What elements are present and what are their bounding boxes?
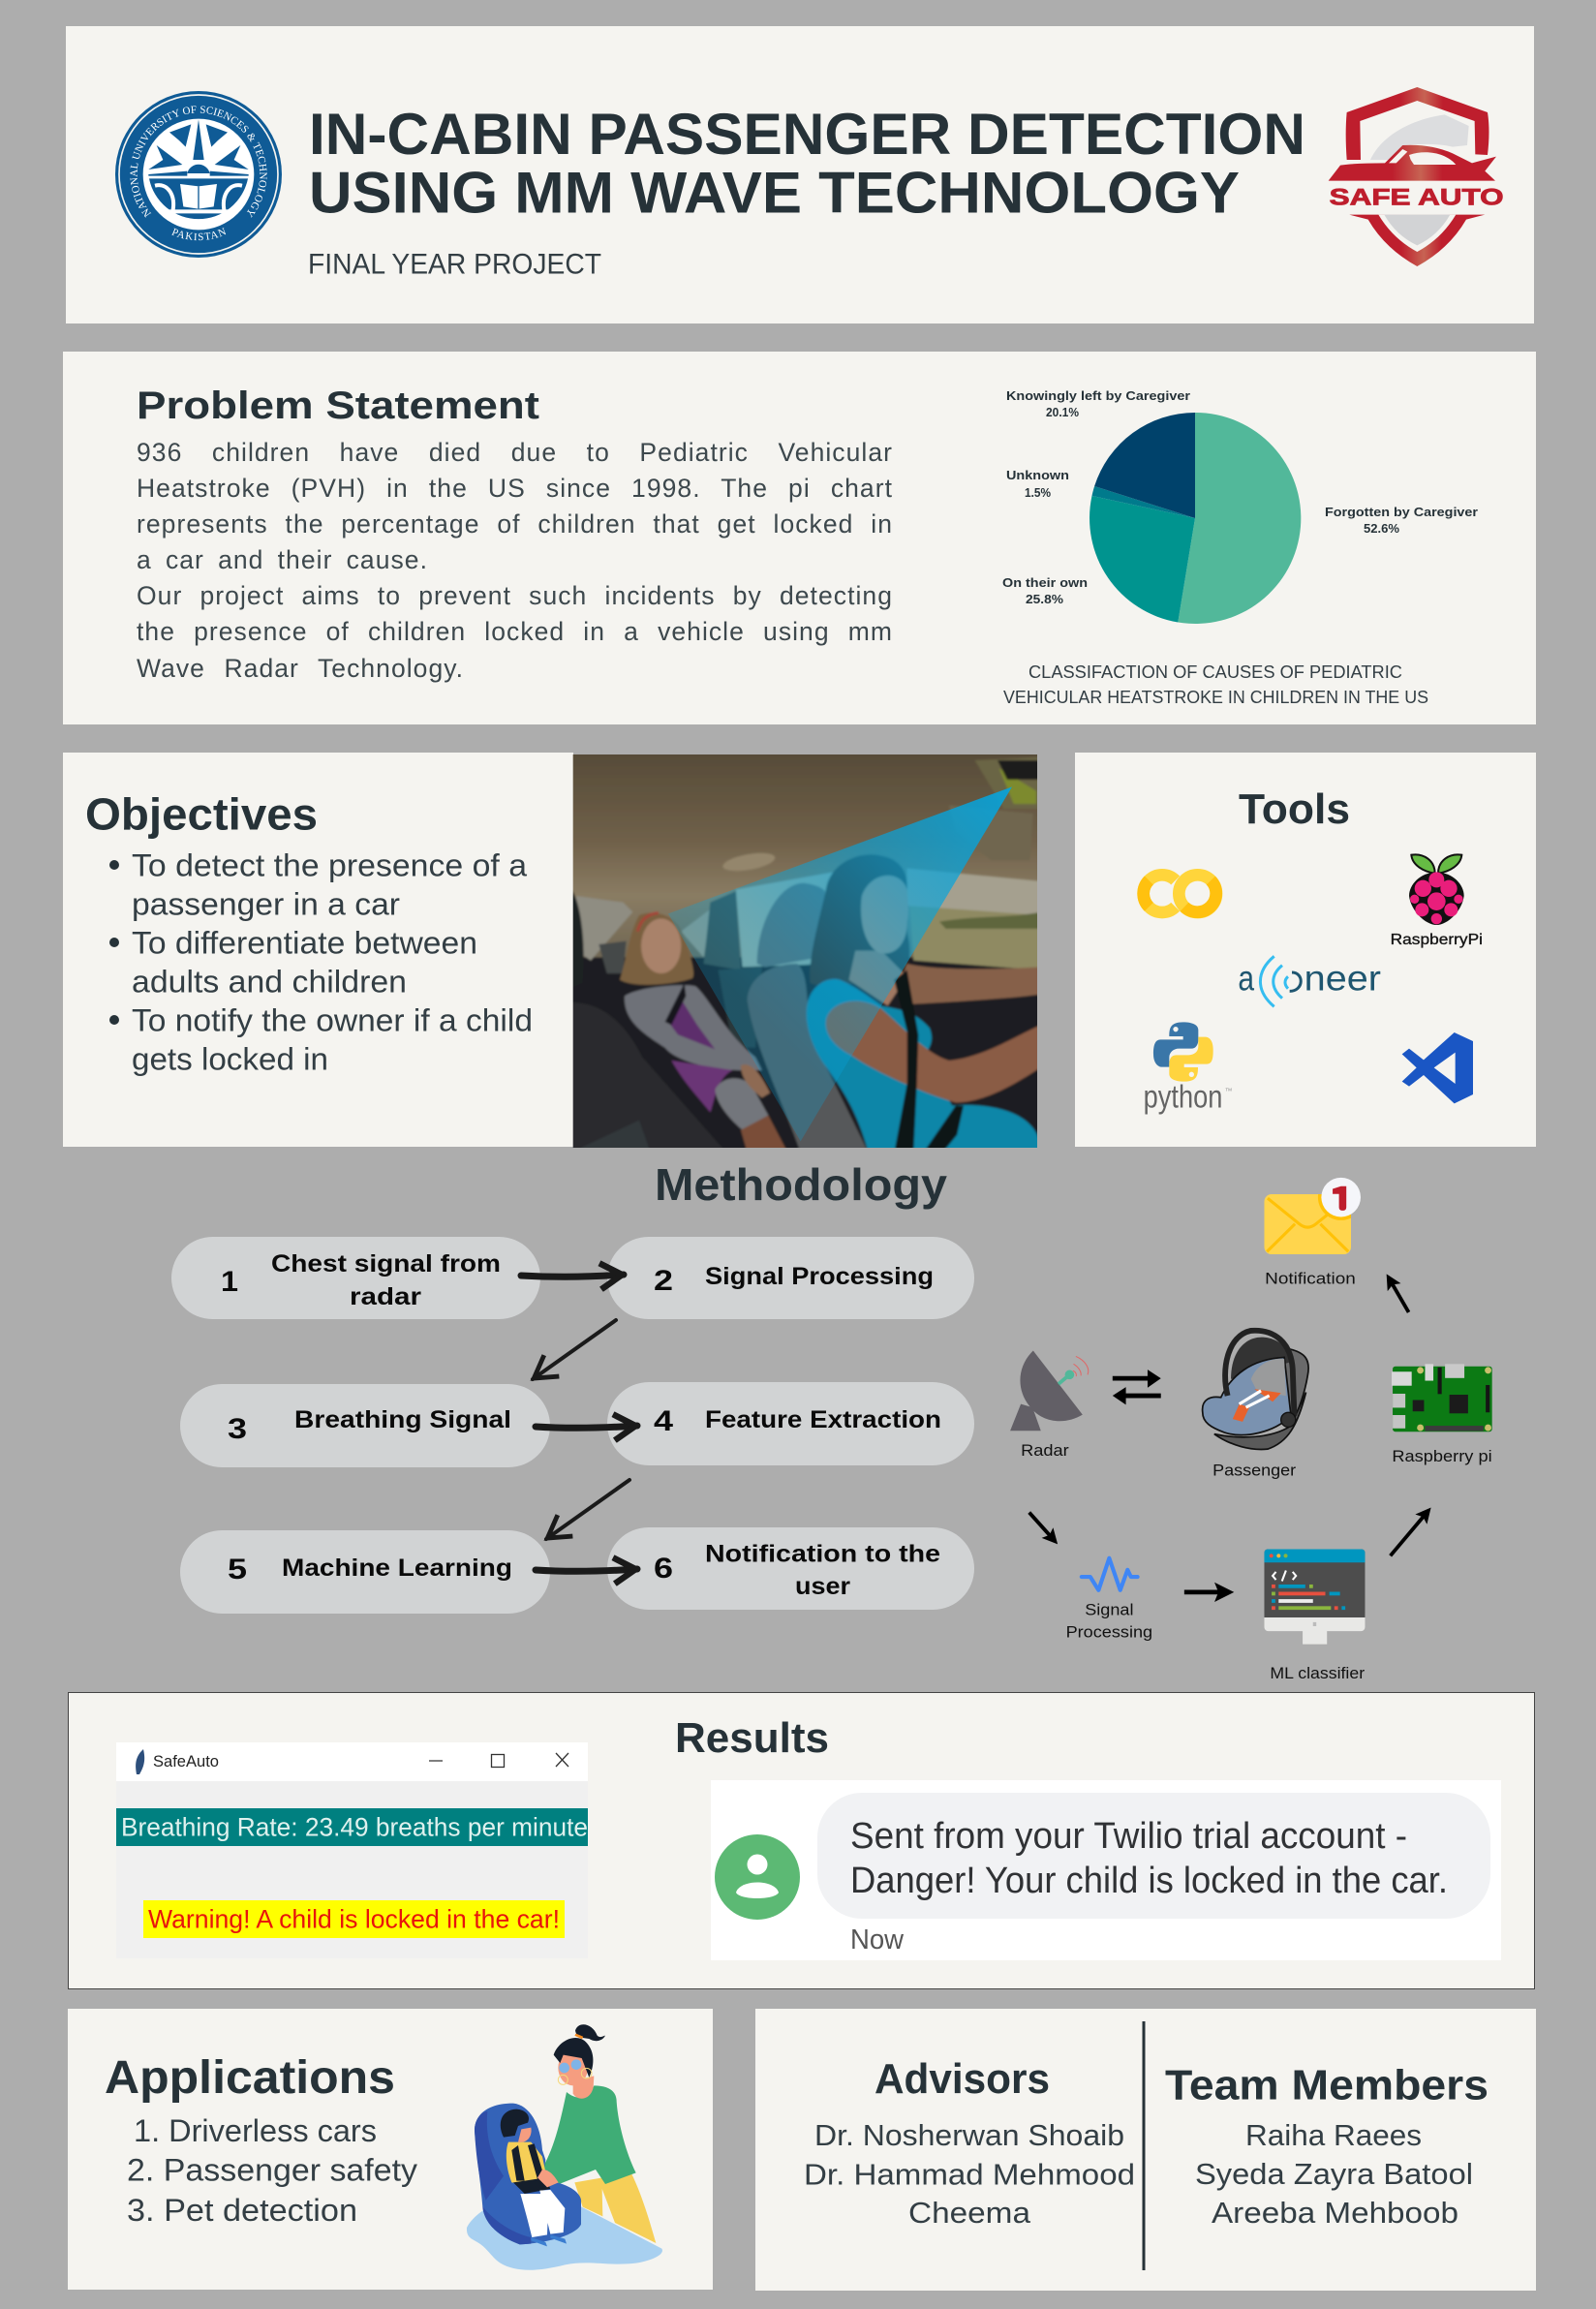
- heading: problem statement: Problem Statement: [137, 385, 539, 427]
- icon: raspberry pi: [1391, 854, 1483, 948]
- step 4 pill: 4: [654, 1405, 673, 1437]
- pie label: forgotten: Forgotten by Caregiver: [1325, 505, 1478, 519]
- screenshot: SMS notification: [711, 1780, 1501, 1960]
- problem statement body text: represents the percentage of children that get locked in: [137, 509, 893, 539]
- pie label: on their own: On their own: [1002, 575, 1088, 590]
- team members: Team Members: [1165, 2061, 1489, 2109]
- arrows between steps: [521, 1275, 637, 1571]
- objectives list: To differentiate between: [132, 926, 477, 961]
- step 1 pill: 1: [221, 1266, 238, 1298]
- screenshot: SafeAuto desktop window: SafeAuto: [153, 1752, 219, 1770]
- pie label: knowingly left: [1006, 388, 1190, 419]
- icon: python: [1144, 1022, 1232, 1115]
- pie label: on their own: [1002, 575, 1088, 606]
- system flow diagram: [1010, 1174, 1492, 1682]
- illustration: parent buckling child in car seat: [467, 2024, 662, 2270]
- icon: Safe Auto shield logo: [1329, 87, 1504, 266]
- pie chart: [1002, 388, 1478, 624]
- icon: NUST university seal: [115, 91, 282, 258]
- heading: tools: Tools: [1239, 785, 1350, 833]
- step 5 pill: Machine Learning: [282, 1555, 512, 1582]
- advisors: [804, 2055, 1135, 2230]
- screenshot: SMS notification: Danger! Your child is locked in the car.: [850, 1861, 1448, 1901]
- step 1 pill: [171, 1237, 540, 1319]
- objectives list: [109, 848, 533, 1077]
- panel: applications: [68, 2009, 713, 2290]
- pie label: unknown: [1006, 468, 1069, 500]
- pie label: knowingly left: Knowingly left by Caregiver: [1006, 388, 1190, 403]
- advisors: Advisors: [875, 2055, 1050, 2103]
- icon: signal waveform: Processing: [1066, 1624, 1152, 1642]
- objectives list: passenger in a car: [132, 887, 400, 922]
- heading: objectives: Objectives: [85, 788, 318, 839]
- problem statement body text: [137, 438, 893, 683]
- advisors: Dr. Nosherwan Shoaib: [814, 2118, 1124, 2152]
- icon: notification: [1264, 1174, 1364, 1288]
- pie label: forgotten: [1325, 505, 1478, 536]
- subtitle: FINAL YEAR PROJECT: [308, 248, 601, 281]
- problem statement body text: Wave Radar Technology.: [137, 654, 464, 683]
- arrows: radar to passenger: [1113, 1370, 1161, 1404]
- screenshot: SMS notification: Now: [850, 1924, 905, 1955]
- icon: acconeer: neer: [1304, 958, 1381, 999]
- objectives list: To detect the presence of a: [132, 848, 527, 883]
- problem statement body text: 936 children have died due to Pediatric Vehicular: [137, 438, 893, 467]
- advisors: Cheema: [908, 2196, 1031, 2230]
- icon: raspberry pi board: [1392, 1364, 1492, 1465]
- icon: baby car seat passenger: [1203, 1331, 1308, 1480]
- screenshot: SafeAuto desktop window: Breathing Rate: 23.49 breaths per minute: [121, 1813, 588, 1842]
- objectives list: To notify the owner if a child: [132, 1003, 533, 1038]
- title: IN-CABIN PASSENGER DETECTION: [309, 102, 1305, 167]
- objectives list: gets locked in: [132, 1042, 328, 1077]
- problem statement body text: a car and their cause.: [137, 545, 428, 574]
- pie label: on their own: 25.8%: [1026, 592, 1063, 606]
- team members: [1165, 2061, 1489, 2230]
- icon: baby car seat passenger: Passenger: [1212, 1462, 1297, 1480]
- section: methodology: [171, 1159, 1492, 1682]
- heading: methodology: Methodology: [655, 1159, 947, 1210]
- panel: results: [68, 1693, 1534, 1989]
- step 2 pill: Signal Processing: [705, 1263, 934, 1290]
- team members: Areeba Mehboob: [1212, 2196, 1458, 2230]
- step 5 pill: 5: [228, 1554, 247, 1586]
- icon: vs code: [1402, 1032, 1473, 1103]
- team members: Syeda Zayra Batool: [1195, 2157, 1473, 2191]
- team members: Raiha Raees: [1245, 2118, 1422, 2152]
- applications list: 1. Driverless cars: [134, 2113, 377, 2148]
- screenshot: SMS notification: Sent from your Twilio trial account -: [850, 1816, 1407, 1857]
- icon: python: TM: [1225, 1088, 1232, 1093]
- step 1 pill: radar: [350, 1283, 421, 1310]
- icon: radar: [1010, 1351, 1089, 1460]
- pie label: unknown: Unknown: [1006, 468, 1069, 482]
- icon: python: python: [1144, 1079, 1222, 1115]
- icon: acconeer: a: [1238, 958, 1254, 999]
- icon: ML classifier monitor: ML classifier: [1270, 1665, 1366, 1682]
- step 2 pill: 2: [654, 1265, 673, 1297]
- panel: header: [66, 26, 1534, 323]
- chart caption: VEHICULAR HEATSTROKE IN CHILDREN IN THE US: [1003, 688, 1428, 707]
- applications list: 2. Passenger safety: [127, 2152, 417, 2187]
- pie label: unknown: 1.5%: [1025, 485, 1051, 500]
- panel: objectives: [63, 753, 573, 1147]
- screenshot: SafeAuto desktop window: Warning! A child is locked in the car!: [148, 1904, 560, 1933]
- title: [309, 102, 1305, 225]
- icon: ML classifier monitor: [1264, 1549, 1366, 1682]
- panel: problem statement: [63, 352, 1536, 724]
- icon: raspberry pi board: Raspberry pi: [1392, 1448, 1492, 1465]
- objectives list: adults and children: [132, 965, 407, 1000]
- icon: notification: Notification: [1265, 1271, 1356, 1288]
- screenshot: SafeAuto desktop window: [116, 1742, 588, 1958]
- step 1 pill: Chest signal from: [271, 1250, 501, 1278]
- pie label: knowingly left: 20.1%: [1046, 405, 1079, 419]
- applications list: [127, 2113, 417, 2228]
- problem statement body text: the presence of children locked in a vehicle using mm: [137, 617, 893, 646]
- step 6 pill: user: [795, 1573, 850, 1600]
- heading: results: Results: [675, 1714, 829, 1762]
- title: USING MM WAVE TECHNOLOGY: [309, 161, 1240, 225]
- step 4 pill: Feature Extraction: [705, 1406, 941, 1433]
- panel: advisors and team members: [755, 2009, 1536, 2291]
- applications list: 3. Pet detection: [127, 2193, 357, 2228]
- step 6 pill: 6: [654, 1553, 673, 1585]
- step 5 pill: [180, 1530, 550, 1614]
- tool logos: [1144, 854, 1483, 1115]
- advisors: Dr. Hammad Mehmood: [804, 2158, 1135, 2191]
- icon: Safe Auto shield logo: SAFE AUTO: [1330, 185, 1504, 211]
- icon: radar: Radar: [1021, 1442, 1069, 1460]
- icon: NUST university seal: PAKISTAN: [171, 228, 227, 240]
- heading: applications: Applications: [105, 2052, 395, 2104]
- step 3 pill: Breathing Signal: [294, 1406, 511, 1433]
- icon: raspberry pi: RaspberryPi: [1391, 932, 1483, 948]
- problem statement body text: Our project aims to prevent such incidents by detecting: [137, 581, 893, 610]
- icon: colab: [1144, 875, 1216, 912]
- problem statement body text: Heatstroke (PVH) in the US since 1998. The pi chart: [137, 474, 893, 503]
- panel: tools: [1075, 753, 1536, 1147]
- chart caption: CLASSIFACTION OF CAUSES OF PEDIATRIC: [1028, 662, 1402, 682]
- icon: signal waveform: Signal: [1085, 1602, 1133, 1619]
- step 2 pill: [607, 1237, 974, 1319]
- photo: radar cone over car interior: [571, 751, 1041, 1153]
- pie label: forgotten: 52.6%: [1364, 521, 1399, 536]
- step 6 pill: [607, 1527, 974, 1610]
- step 3 pill: 3: [228, 1413, 247, 1445]
- step 3 pill: [180, 1384, 550, 1467]
- icon: signal waveform: [1066, 1558, 1152, 1642]
- chart caption: [1003, 662, 1428, 707]
- step 4 pill: [607, 1382, 974, 1465]
- icon: acconeer: [1238, 956, 1381, 1006]
- icon: NUST university seal: NATIONAL UNIVERSITY OF SCIENCES & TECHNOLOGY: [130, 106, 267, 218]
- step 6 pill: Notification to the: [705, 1540, 940, 1567]
- arrows: processing flow: [1029, 1280, 1426, 1592]
